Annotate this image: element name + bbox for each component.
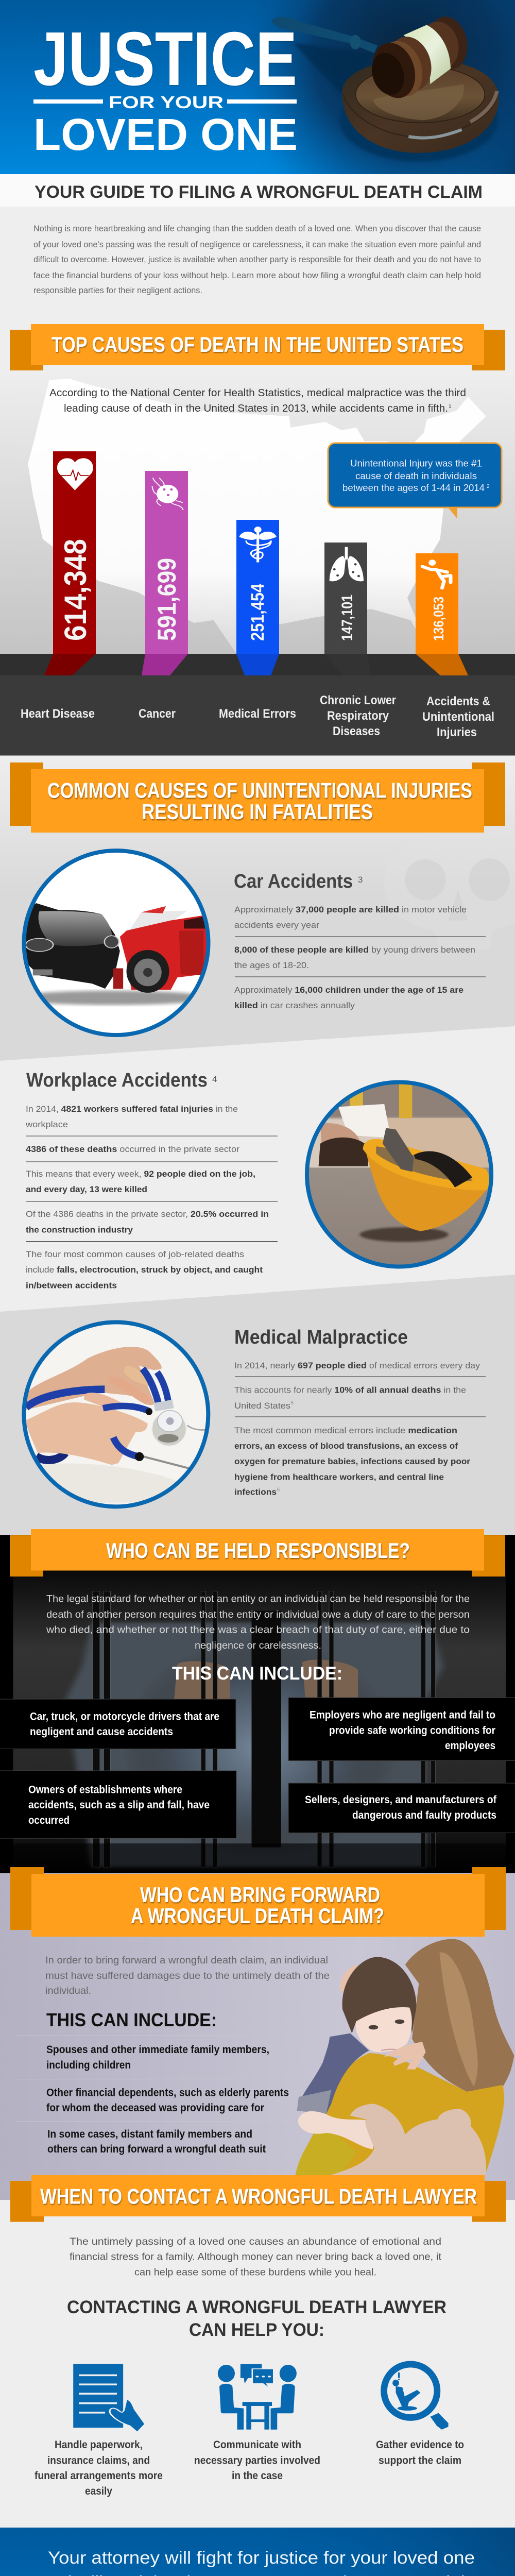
text: stress paragraph: can help ease some of these burdens while you heal.: [134, 2267, 376, 2278]
card: employers: Employers who are negligent and fail to: [310, 1709, 495, 1721]
callout: unintentional injury: 2: [487, 484, 490, 489]
item: gather evidence: [376, 2361, 464, 2467]
labels: cause names: Injuries: [437, 725, 477, 739]
bar: cancer: 591,699: [152, 558, 181, 641]
text: legal standard: The legal standard for whether or not an entity or an individual can be held responsible for the: [46, 1594, 470, 1605]
text: car facts: [234, 905, 486, 1010]
text: paperwork: funeral arrangements more: [35, 2470, 163, 2482]
text: workplace facts: workplace: [25, 1120, 68, 1129]
text: communicate: in the case: [232, 2470, 283, 2482]
bar: heart disease: 614,348: [58, 539, 93, 641]
card: employers: [288, 1698, 515, 1761]
text: medical facts: 6: [277, 1487, 280, 1492]
list: eligible claimants: for whom the deceased was providing care for: [46, 2102, 264, 2114]
icon: caduceus: [239, 527, 277, 562]
chart: bars of causes: [44, 451, 468, 675]
text: car facts: Approximately 16,000 children under the age of 15 are: [234, 985, 464, 995]
text: workplace facts: include falls, electrocution, struck by object, and caught: [26, 1265, 263, 1275]
ribbon: who can bring forward: WHO CAN BRING FORWARD: [140, 1883, 380, 1907]
ribbon: common causes heading: RESULTING IN FATALITIES: [142, 800, 373, 824]
list: eligible claimants: In some cases, distant family members and: [47, 2128, 252, 2140]
text: legal standard: death of another person requires that the entity or individual owe a duty of care to the person: [46, 1609, 470, 1620]
panel: workplace background: [0, 1026, 515, 1312]
text: stress paragraph: [70, 2236, 442, 2278]
heading: car accidents: Car Accidents: [234, 871, 353, 892]
text: legal standard: [46, 1594, 470, 1651]
bar: accidents and unintentional injuries: [416, 553, 468, 675]
text block: introduction: of your loved one’s passing was the result of negligence or carelessness, it can make the situation even more painful and: [33, 240, 481, 249]
panel: common causes background: [0, 756, 515, 1061]
image: man behind bars: [13, 1567, 506, 1868]
list: eligible claimants: others can bring forward a wrongful death suit: [47, 2143, 266, 2155]
callout: unintentional injury: cause of death in individuals: [355, 471, 477, 481]
text: medical facts: In 2014, nearly 697 people died of medical errors every day: [234, 1361, 480, 1370]
text: medical facts: [234, 1361, 486, 1497]
base platform: [0, 654, 515, 755]
icon: gavel and sound block: [271, 13, 499, 161]
text: medical facts: oxygen for premature babies, infections caused by poor: [234, 1456, 470, 1466]
bar: cancer: [142, 471, 188, 675]
text: paperwork: [35, 2439, 163, 2497]
title: loved one: LOVED ONE: [33, 110, 298, 160]
text: paperwork: easily: [85, 2485, 112, 2497]
text: damages paragraph: must have suffered damages due to the untimely death of the: [45, 1971, 330, 1981]
text block: ncfhs statement: [49, 387, 466, 414]
item: communicate: [194, 2364, 320, 2482]
image: helmet on floor: [305, 1080, 493, 1268]
text: gather evidence: support the claim: [379, 2454, 461, 2467]
list: eligible claimants: Spouses and other immediate family members,: [46, 2044, 269, 2056]
title: justice: JUSTICE: [33, 16, 297, 101]
text block: ncfhs statement: According to the National Center for Health Statistics, medical malpractice was the third: [49, 387, 466, 399]
labels: cause names: Accidents &: [426, 694, 490, 708]
icon: falling person: [422, 560, 451, 588]
text: stress paragraph: financial stress for a family. Although money can never bring back a loved one, it: [70, 2251, 442, 2262]
text block: introduction: face the financial burdens of your loss without help. Learn more about how filing a wrongful death claim can help hold: [33, 270, 481, 280]
icon: heart: [57, 458, 93, 490]
labels: cause names: Medical Errors: [219, 707, 296, 721]
map of the united states: [28, 379, 486, 654]
text: paperwork: Handle paperwork,: [55, 2439, 143, 2451]
text: legal standard: negligence or carelessness.: [195, 1640, 321, 1651]
item: paperwork: [35, 2364, 163, 2497]
icon: cancer cell: [152, 478, 183, 510]
icon: two people at a table: [218, 2364, 297, 2430]
labels: cause names: Cancer: [139, 707, 176, 721]
card: owners: [0, 1771, 236, 1838]
ribbon: who can bring forward: A WRONGFUL DEATH CLAIM?: [131, 1904, 384, 1928]
callout: unintentional injury: between the ages of 1-44 in 2014: [342, 483, 485, 493]
panel: contact call to action: [0, 2528, 515, 2576]
text: paperwork: insurance claims, and: [47, 2454, 150, 2467]
text block: introduction: responsible parties for their negligent actions.: [33, 285, 202, 295]
panel: workplace accidents: [25, 1070, 499, 1290]
text: communicate: necessary parties involved: [194, 2454, 320, 2467]
text: attorney statement: [41, 2548, 482, 2576]
heading: this can include: THIS CAN INCLUDE:: [172, 1663, 342, 1684]
title: for your: FOR YOUR: [109, 93, 224, 112]
text: medical facts: 5: [291, 1400, 294, 1405]
icon: lungs: [330, 547, 364, 581]
callout: unintentional injury: Unintentional Injury was the #1: [350, 459, 482, 469]
text: medical facts: The most common medical errors include medication: [234, 1426, 457, 1435]
heading: workplace accidents: 4: [212, 1074, 217, 1084]
ribbon: top causes heading: [10, 324, 505, 370]
panel: who can be held responsible: [0, 1529, 515, 1877]
ribbon: when to contact: [10, 2175, 506, 2222]
title rule right: [227, 99, 297, 104]
card: drivers: [0, 1699, 236, 1749]
text: car facts: the ages of 18-20.: [234, 960, 309, 970]
text: workplace facts: in/between accidents: [26, 1281, 117, 1290]
text: medical facts: errors, an excess of blood transfusions, an excess of: [234, 1441, 458, 1451]
icon: faint skull: [384, 833, 515, 949]
labels: cause names: Heart Disease: [21, 707, 95, 721]
labels: cause names: [21, 693, 494, 739]
card: owners: accidents, such as a slip and fall, have: [28, 1799, 210, 1811]
text block: ncfhs statement: leading cause of death in the United States in 2013, while accidents came in fifth.: [64, 403, 448, 414]
panel: car accidents: [13, 851, 486, 1035]
text: stress paragraph: The untimely passing of a loved one causes an abundance of emotional and: [70, 2236, 441, 2247]
bar: medical errors: [236, 520, 279, 675]
text: workplace facts: 4386 of these deaths occurred in the private sector: [26, 1144, 239, 1154]
text: workplace facts: In 2014, 4821 workers suffered fatal injuries in the: [26, 1104, 238, 1114]
card: drivers: Car, truck, or motorcycle drivers that are: [30, 1711, 219, 1723]
text: medical facts: infections: [234, 1487, 277, 1497]
text block: introduction: difficult to overcome. However, justice is available when another party is responsible for their death and you do not have to: [33, 255, 481, 264]
text: workplace facts: the construction industry: [26, 1225, 133, 1234]
panel: subtitle band: [0, 174, 515, 207]
card: sellers: [288, 1783, 515, 1833]
bar: medical errors: 251,454: [248, 584, 268, 641]
text: damages paragraph: individual.: [45, 1986, 91, 1996]
panel: header banner: [0, 0, 515, 174]
panel: medical malpractice: [24, 1322, 486, 1506]
heading: car accidents: 3: [358, 875, 363, 885]
text: medical facts: This accounts for nearly 10% of all annual deaths in the: [234, 1385, 466, 1395]
text: car facts: Approximately 37,000 people are killed in motor vehicle: [234, 905, 467, 914]
list: eligible claimants: [15, 2036, 294, 2155]
labels: cause names: Respiratory: [327, 709, 389, 723]
text: medical facts: United States: [234, 1401, 290, 1411]
list: eligible claimants: Other financial dependents, such as elderly parents: [46, 2087, 289, 2099]
text: workplace facts: [25, 1104, 278, 1290]
labels: cause names: Diseases: [333, 724, 380, 738]
heading: workplace accidents: Workplace Accidents: [26, 1070, 208, 1091]
heading: this can include: THIS CAN INCLUDE:: [46, 2009, 217, 2030]
heading: medical malpractice: Medical Malpractice: [234, 1327, 408, 1348]
text: car facts: accidents every year: [234, 920, 319, 930]
bar: heart disease: [44, 451, 96, 675]
image: stethoscope in hands: [24, 1322, 208, 1506]
labels: cause names: Unintentional: [422, 710, 494, 724]
panel: top causes of death: [0, 324, 515, 755]
labels: cause names: Chronic Lower: [320, 693, 396, 707]
card: sellers: dangerous and faulty products: [352, 1809, 496, 1821]
card: employers: employees: [445, 1740, 495, 1752]
text: workplace facts: Of the 4386 deaths in the private sector, 20.5% occurred in: [26, 1209, 269, 1219]
text: medical facts: hygiene from healthcare workers, and central line: [234, 1472, 444, 1482]
text: damages paragraph: In order to bring forward a wrongful death claim, an individual: [45, 1955, 328, 1966]
text: gather evidence: Gather evidence to: [376, 2439, 464, 2451]
title rule left: [33, 99, 103, 104]
ribbon: common causes heading: [10, 762, 505, 833]
heading: contacting a lawyer: [67, 2297, 447, 2340]
image: mother and child: [295, 1939, 514, 2176]
icon: document and hand: [73, 2364, 145, 2432]
heading: subtitle: YOUR GUIDE TO FILING A WRONGFUL DEATH CLAIM: [35, 182, 483, 202]
bar: chronic lower respiratory diseases: 147,101: [339, 595, 356, 641]
image: car crash: [13, 851, 210, 1035]
text block: ncfhs statement: 1: [449, 404, 452, 410]
text: communicate: [194, 2439, 320, 2482]
callout: unintentional injury: [328, 443, 502, 519]
text: legal standard: who died, and whether or not there was a clear breach of that duty of care, either due to: [46, 1625, 470, 1635]
text: workplace facts: The four most common causes of job-related deaths: [26, 1249, 244, 1259]
panel: who can bring forward a claim: [0, 1867, 515, 2200]
card: owners: occurred: [28, 1815, 70, 1826]
text: communicate: Communicate with: [213, 2439, 301, 2451]
text: car facts: 8,000 of these people are killed by young drivers between: [234, 945, 475, 955]
bar: accidents and unintentional injuries: 136,053: [431, 597, 447, 641]
text: attorney statement: Your attorney will fight for justice for your loved one: [48, 2548, 475, 2568]
ribbon: who can be held responsible: WHO CAN BE HELD RESPONSIBLE?: [106, 1538, 410, 1563]
bar: chronic lower respiratory diseases: [324, 543, 371, 675]
ribbon: who can be held responsible: [10, 1529, 505, 1577]
text block: introduction: [33, 224, 481, 295]
text block: introduction: Nothing is more heartbreaking and life changing than the sudden death of a loved one. When you discover that the cause: [33, 224, 481, 233]
heading: contacting a lawyer: CONTACTING A WRONGFUL DEATH LAWYER: [67, 2297, 447, 2317]
heading: contacting a lawyer: CAN HELP YOU:: [189, 2320, 324, 2340]
card: owners: Owners of establishments where: [28, 1784, 182, 1795]
panel: medical background: [0, 1275, 515, 1538]
card: drivers: negligent and cause accidents: [30, 1726, 173, 1738]
text: workplace facts: This means that every week, 92 people died on the job,: [26, 1169, 255, 1179]
ribbon: who can bring forward: [10, 1867, 506, 1937]
text: car facts: killed in car crashes annually: [234, 1001, 355, 1010]
card: employers: provide safe working conditions for: [329, 1725, 495, 1736]
card: sellers: Sellers, designers, and manufacturers of: [305, 1794, 497, 1806]
text: gather evidence: [376, 2439, 464, 2467]
text: workplace facts: and every day, 13 were killed: [26, 1184, 147, 1194]
icon: magnifier over slip and fall: [381, 2361, 449, 2430]
list: eligible claimants: including children: [46, 2059, 131, 2071]
text: damages paragraph: [45, 1955, 330, 1996]
